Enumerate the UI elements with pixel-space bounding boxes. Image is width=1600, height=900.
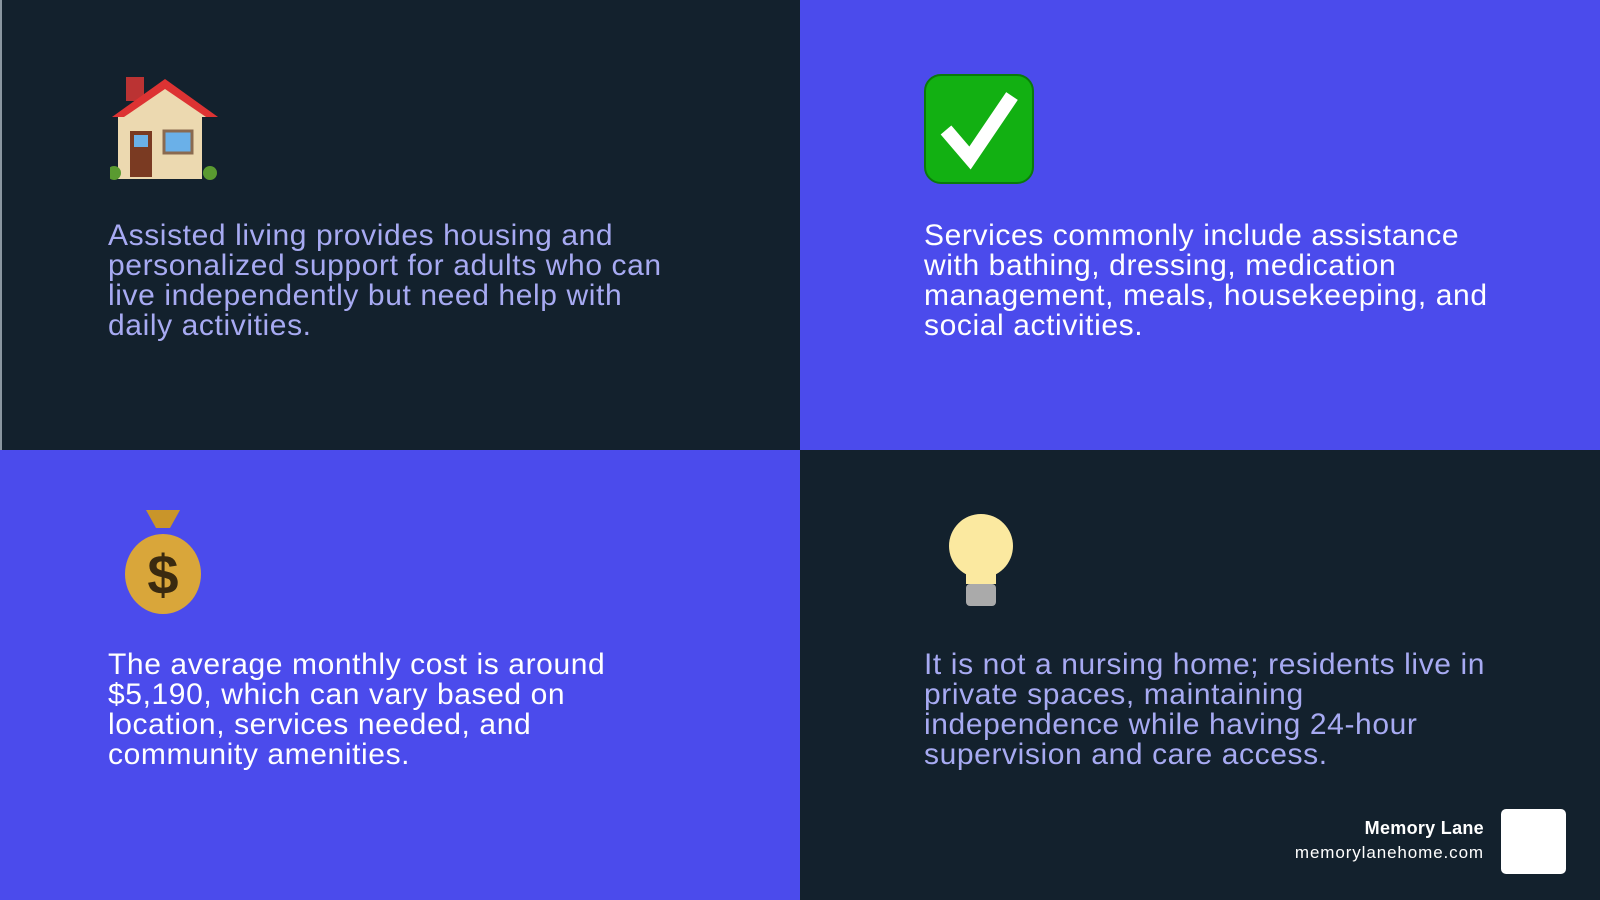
- text block: social activities.: [924, 309, 1143, 342]
- text block: $5,190, which can vary based on: [108, 678, 565, 711]
- text block: Services commonly include assistance: [924, 219, 1459, 252]
- text block: [924, 219, 1488, 342]
- text block: supervision and care access.: [924, 738, 1328, 771]
- panel: cost: [0, 450, 800, 900]
- text block: [924, 648, 1485, 771]
- text block: management, meals, housekeeping, and: [924, 279, 1488, 312]
- text block: location, services needed, and: [108, 708, 531, 741]
- text block: live independently but need help with: [108, 279, 622, 312]
- panel: what it is: [0, 0, 800, 450]
- text block: It is not a nursing home; residents live in: [924, 648, 1485, 681]
- branding: memorylanehome.com: [1295, 843, 1484, 862]
- icon: money bag: [125, 510, 201, 614]
- panel: not a nursing home: [800, 450, 1600, 900]
- text block: [108, 219, 662, 342]
- icon: check: [924, 74, 1034, 184]
- branding: [1295, 818, 1484, 862]
- text block: personalized support for adults who can: [108, 249, 662, 282]
- text block: community amenities.: [108, 738, 410, 771]
- icon: house: [110, 77, 218, 180]
- text block: daily activities.: [108, 309, 312, 342]
- logo box: [1501, 809, 1566, 874]
- branding: Memory Lane: [1365, 818, 1484, 838]
- icon: light bulb: [949, 514, 1013, 606]
- text block: The average monthly cost is around: [108, 648, 605, 681]
- panel: services: [800, 0, 1600, 450]
- icon: money bag: $: [147, 543, 179, 606]
- text block: [108, 648, 605, 771]
- text block: with bathing, dressing, medication: [924, 249, 1396, 282]
- text block: independence while having 24-hour: [924, 708, 1418, 741]
- text block: private spaces, maintaining: [924, 678, 1304, 711]
- text block: Assisted living provides housing and: [108, 219, 613, 252]
